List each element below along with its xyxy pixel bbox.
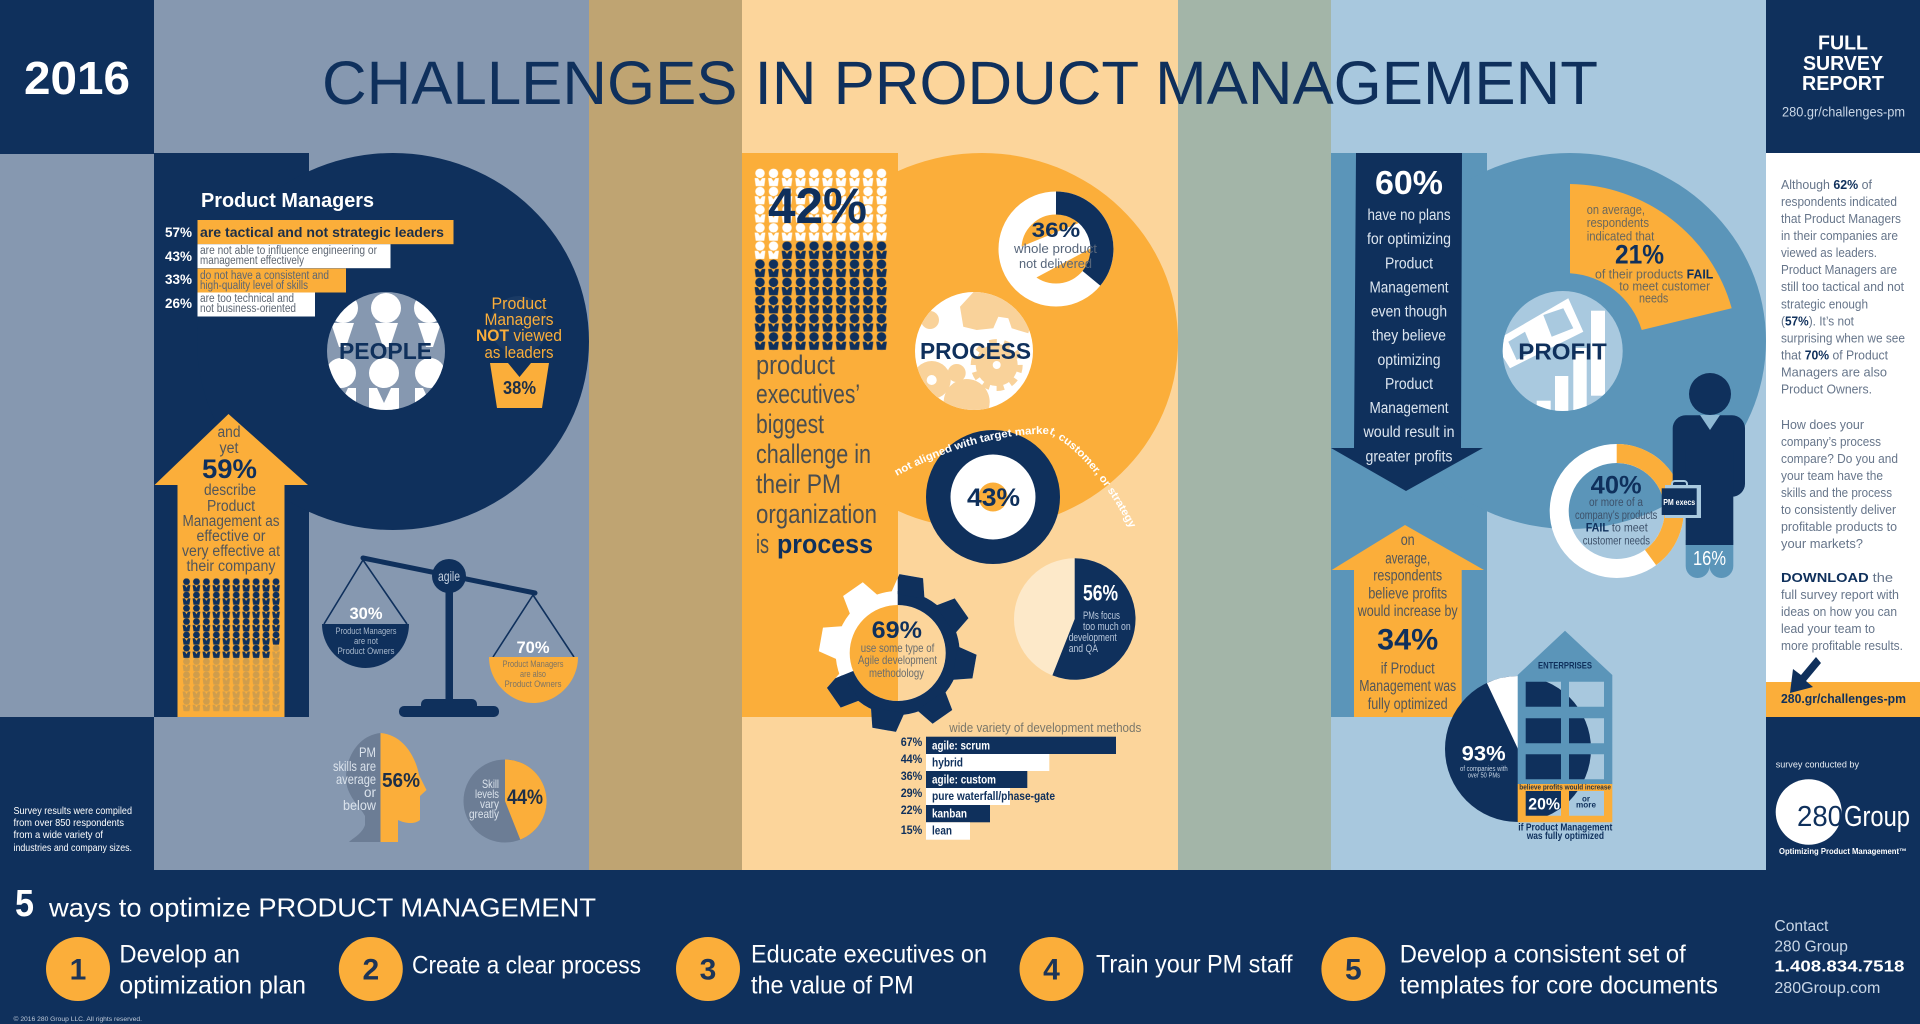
text block: survey commentary: DOWNLOAD the	[1781, 570, 1893, 585]
arrow: 59 percent effective: describe	[204, 482, 256, 499]
chart: development methods bars: 44%	[901, 752, 923, 766]
chart: development methods bars: pure waterfall/phase-gate	[932, 789, 1055, 803]
step 4: 4	[1043, 954, 1060, 986]
contact details: 280 Group	[1774, 939, 1848, 956]
callout: download link band: 280.gr/challenges-pm	[1781, 691, 1906, 706]
text block: survey commentary: full survey report with	[1781, 587, 1899, 602]
chart: development methods bars: agile: custom	[932, 772, 996, 786]
chart: gear 69 percent: 69%	[872, 617, 922, 644]
text: biggest challenge is process: organization	[756, 499, 877, 529]
arrow: 34 percent profit increase: 34%	[1377, 623, 1438, 656]
bar list: product manager traits: 43%	[165, 248, 193, 264]
bar list: product manager traits	[165, 220, 454, 316]
panel: full survey report	[1766, 0, 1920, 153]
callout: not viewed as leaders: Product	[492, 294, 547, 313]
callout: 21 percent fail: respondents	[1587, 216, 1649, 230]
logo: 280 Group: 280	[1797, 801, 1843, 833]
text block: survey commentary: surprising when we see	[1781, 330, 1905, 346]
arrow: 60 percent no plans: Management	[1370, 400, 1449, 417]
chart: agile scale: 30%	[350, 604, 382, 623]
contact details: 1.408.834.7518	[1774, 959, 1905, 976]
chart: people grid 42 percent: 42%	[768, 178, 867, 234]
chart: agile scale: are not	[354, 636, 378, 647]
chart: gear 69 percent: methodology	[869, 666, 924, 680]
step 3: 3	[700, 954, 716, 986]
text block: survey commentary: Managers are also	[1781, 364, 1887, 380]
heading: 5 ways to optimize	[15, 883, 596, 925]
text: biggest challenge is process: challenge in	[756, 439, 871, 469]
bar list: product manager traits: 33%	[165, 271, 193, 287]
step 5	[1321, 937, 1718, 1001]
icon: briefcase	[1662, 481, 1701, 518]
arrow: 60 percent no plans: for optimizing	[1367, 231, 1451, 248]
text block: survey commentary: ideas on how you can	[1781, 604, 1897, 619]
bar list: product manager traits: are too technical and	[200, 293, 294, 305]
heading: 5 ways to optimize: ways to optimize PRODUCT MANAGEMENT	[48, 893, 596, 923]
copyright: © 2016 280 Group LLC. All rights reserved.	[14, 1015, 142, 1023]
chart: agile scale: Product Owners	[338, 646, 395, 657]
callout: 21 percent fail: indicated that	[1587, 230, 1655, 244]
chart: enterprises pie and building: believe profits would increase	[1519, 782, 1611, 792]
heading: 5 ways to optimize: 5	[15, 883, 34, 925]
arrow: 60 percent no plans: they believe	[1372, 328, 1446, 345]
step 3: Educate executives on	[751, 941, 987, 969]
text block: survey commentary	[1781, 177, 1905, 653]
chart: donut 36 percent: not delivered	[1019, 256, 1092, 271]
contact details: Contact	[1774, 918, 1829, 935]
text block: survey commentary: Product Owners.	[1781, 382, 1872, 397]
chart: donut 43 percent: 43%	[967, 484, 1020, 512]
text block: survey commentary: still too tactical and not	[1781, 279, 1904, 294]
callout: not viewed as leaders: 38%	[503, 378, 536, 398]
arrow: 59 percent effective: 59%	[202, 454, 257, 484]
icon: head 56 percent skills: skills are	[333, 758, 376, 774]
chart: development methods bars: 15%	[901, 823, 923, 837]
chart: pie 44 percent skill levels: vary	[480, 797, 499, 811]
chart: enterprises pie and building	[1445, 631, 1613, 842]
panel: process	[742, 153, 1178, 840]
chart: enterprises pie and building: 93%	[1462, 743, 1506, 766]
icon: briefcase: PM execs	[1663, 497, 1695, 507]
chart: donut 36 percent: 36%	[1032, 219, 1081, 242]
logo: 280 Group: Optimizing Product Management™	[1779, 847, 1907, 856]
callout: download link band	[1766, 682, 1920, 717]
text block: survey commentary: skills and the process	[1781, 485, 1892, 500]
chart: enterprises pie and building: over 50 PMs	[1468, 772, 1500, 780]
text: biggest challenge is process: biggest	[756, 409, 825, 439]
callout: 21 percent fail	[1570, 184, 1732, 330]
chart: donut 36 percent: whole product	[1013, 241, 1097, 256]
icon: profit circle: PROFIT	[1518, 338, 1607, 364]
step 1	[46, 937, 306, 1001]
arrow: 34 percent profit increase: average,	[1385, 550, 1430, 567]
chart: agile scale: Product Managers	[336, 626, 397, 637]
callout: 21 percent fail: needs	[1639, 291, 1668, 305]
step 1: optimization plan	[119, 971, 306, 999]
bar list: product manager traits: are not able to influence engineering or	[200, 245, 377, 257]
contact details: 280Group.com	[1774, 980, 1880, 997]
title: CHALLENGES IN PRODUCT MANAGEMENT	[322, 49, 1598, 117]
chart: pie 44 percent skill levels: Skill	[482, 777, 499, 791]
callout: 21 percent fail: on average,	[1587, 203, 1645, 217]
survey note: from a wide variety of	[14, 829, 103, 841]
text block: survey commentary: Although 62% of	[1781, 177, 1872, 192]
text block: survey commentary: that Product Managers	[1781, 211, 1901, 226]
bar list: product manager traits: are tactical and not strategic leaders	[200, 224, 444, 240]
icon: process circle: PROCESS	[920, 338, 1031, 364]
chart: pie 56 percent: and QA	[1069, 643, 1099, 655]
text block: survey commentary: strategic enough	[1781, 296, 1868, 312]
callout: not viewed as leaders: as leaders	[484, 343, 554, 362]
step 1: 1	[70, 954, 86, 986]
text block: survey commentary: your team have the	[1781, 468, 1883, 483]
chart: development methods bars: wide variety of development methods	[948, 721, 1141, 735]
contact details	[1774, 918, 1905, 997]
bar list: product manager traits: high-quality level of skills	[200, 280, 308, 292]
step 2: Create a clear process	[412, 951, 641, 979]
panel: people	[154, 153, 589, 842]
arrow: 59 percent effective: very effective at	[182, 543, 281, 560]
chart: donut 40 percent: customer needs	[1583, 535, 1650, 547]
arrow: 60 percent no plans: Product	[1385, 255, 1434, 272]
logo: 280 Group: survey conducted by	[1776, 760, 1859, 771]
chart: development methods bars: 36%	[901, 769, 923, 783]
arrow: 60 percent no plans: would result in	[1363, 424, 1454, 441]
survey note: from over 850 respondents	[14, 817, 124, 829]
text block: survey commentary: How does your	[1781, 417, 1865, 432]
icon: head 56 percent skills	[333, 733, 426, 842]
logo: 280 Group	[1776, 760, 1910, 856]
text: biggest challenge is process: is	[756, 529, 769, 559]
chart: development methods bars: kanban	[932, 806, 967, 820]
chart: development methods bars: agile: scrum	[932, 738, 990, 752]
chart: pie 44 percent skill levels: 44%	[507, 786, 543, 809]
chart: donut 40 percent: or more of a	[1589, 497, 1644, 509]
arrow: 60 percent no plans: even though	[1371, 304, 1447, 321]
chart: donut 40 percent: 40%	[1591, 471, 1642, 499]
step 5: templates for core documents	[1400, 971, 1718, 999]
step 3	[676, 937, 987, 1001]
arrow: 34 percent profit increase: on	[1401, 532, 1415, 549]
callout: not viewed as leaders: Managers	[484, 310, 554, 329]
arrow: 34 percent profit increase: Management was	[1359, 678, 1456, 695]
chart: pie 44 percent skill levels	[464, 759, 547, 842]
arrow: 60 percent no plans: Product	[1385, 376, 1434, 393]
arrow: 59 percent effective: Product	[207, 498, 256, 515]
arrow: 59 percent effective: their company	[186, 558, 276, 575]
arrow: 60 percent no plans: 60%	[1375, 164, 1443, 201]
chart: pie 56 percent: development	[1069, 632, 1117, 644]
step 4	[1020, 937, 1293, 1001]
arrow: 34 percent profit increase: respondents	[1373, 568, 1442, 585]
icon: process circle	[915, 292, 1033, 410]
chart: pie 44 percent skill levels: greatly	[469, 807, 499, 821]
chart: development methods bars: 22%	[901, 803, 923, 817]
survey note: Survey results were compiled	[14, 805, 132, 817]
icon: people circle: PEOPLE	[339, 338, 432, 364]
panel: full survey report: FULL	[1818, 32, 1868, 54]
icon: head 56 percent skills: below	[343, 797, 377, 813]
chart: development methods bars: 67%	[901, 735, 923, 749]
step 1: Develop an	[119, 941, 240, 969]
chart: people grid 42 percent	[753, 169, 888, 350]
panel: profit	[1331, 153, 1766, 842]
text block: survey commentary: profitable products to	[1781, 519, 1897, 534]
text block: survey commentary: more profitable results.	[1781, 638, 1903, 653]
arrow: 60 percent no plans: have no plans	[1368, 207, 1451, 224]
callout: 21 percent fail: to meet customer	[1619, 280, 1710, 294]
text block: survey commentary: respondents indicated	[1781, 194, 1897, 209]
panel: full survey report: SURVEY	[1803, 53, 1884, 75]
chart: pie 56 percent	[1014, 558, 1136, 680]
text block: survey commentary: company’s process	[1781, 434, 1881, 449]
panel: full survey report: 280.gr/challenges-pm	[1782, 104, 1905, 120]
icon: head 56 percent skills: PM	[359, 744, 376, 760]
arrow: 34 percent profit increase: believe profits	[1368, 585, 1447, 602]
chart: pie 56 percent: 56%	[1083, 581, 1118, 606]
text: biggest challenge is process: executives’	[756, 379, 860, 409]
arrow: 59 percent effective: yet	[220, 440, 239, 457]
chart: donut 43 percent	[894, 426, 1136, 564]
bar list: product manager traits: not business-oriented	[200, 303, 296, 315]
chart: agile scale: Product Owners	[504, 679, 562, 690]
text block: survey commentary: your markets?	[1781, 536, 1863, 551]
callout: not viewed as leaders	[476, 294, 562, 408]
bar list: product manager traits: do not have a consistent and	[200, 270, 329, 282]
arrow: points to download link	[1790, 657, 1821, 693]
bar list: product manager traits: 26%	[165, 295, 193, 311]
text: biggest challenge is process	[756, 350, 877, 559]
arrow: 60 percent no plans: greater profits	[1366, 449, 1453, 466]
chart: donut 36 percent	[1010, 203, 1102, 295]
text: biggest challenge is process: their PM	[756, 469, 841, 499]
chart: donut 40 percent: FAIL to meet	[1586, 523, 1648, 535]
arrow: 59 percent effective: effective or	[196, 528, 266, 545]
callout: not viewed as leaders: NOT viewed	[476, 326, 562, 345]
chart: enterprises pie and building: or	[1582, 795, 1590, 804]
panel: full survey report: REPORT	[1802, 73, 1884, 95]
text block: survey commentary: to consistently deliver	[1781, 502, 1897, 517]
text block: survey commentary: in their companies are	[1781, 228, 1898, 243]
chart: enterprises pie and building: was fully optimized	[1526, 831, 1604, 842]
arrow: 59 percent effective: and	[218, 424, 240, 441]
callout: 21 percent fail: of their products FAIL	[1595, 267, 1714, 281]
chart: development methods bars: 29%	[901, 786, 923, 800]
chart: donut 40 percent: company’s products	[1575, 510, 1658, 522]
chart: agile scale: agile	[438, 568, 460, 584]
chart: enterprises pie and building: if Product Management	[1518, 823, 1613, 834]
chart: pie 56 percent: PMs focus	[1083, 610, 1120, 622]
text block: survey commentary: Product Managers are	[1781, 262, 1897, 277]
chart: development methods bars	[901, 721, 1141, 840]
icon: head 56 percent skills: or	[364, 784, 376, 800]
text block: survey commentary: viewed as leaders.	[1781, 245, 1877, 260]
icon: people circle	[326, 292, 445, 412]
icon: head 56 percent skills: 56%	[382, 770, 420, 792]
heading: product managers: Product Managers	[201, 190, 374, 212]
chart: development methods bars: lean	[932, 824, 952, 838]
curved label: not aligned with target market, customer, or strategy	[894, 426, 1136, 526]
bar list: product manager traits: management effectively	[200, 255, 304, 267]
chart: enterprises pie and building: of companies with	[1460, 766, 1508, 773]
chart: agile scale: 70%	[516, 638, 550, 657]
chart: agile scale	[322, 558, 578, 717]
chart: pie 44 percent skill levels: levels	[475, 787, 499, 801]
icon: PM exec figure: 16%	[1693, 548, 1726, 570]
step 2	[339, 937, 641, 1001]
survey note: industries and company sizes.	[14, 842, 132, 854]
chart: gear 69 percent: Agile development	[858, 653, 938, 667]
chart: gear 69 percent: use some type of	[861, 641, 935, 655]
bar list: product manager traits: 57%	[165, 224, 193, 240]
text block: survey commentary: that 70% of Product	[1781, 348, 1888, 362]
step 2: 2	[362, 954, 379, 986]
arrow: 59 percent effective	[154, 414, 308, 717]
text: biggest challenge is process: process	[777, 529, 873, 559]
icon: profit circle	[1500, 291, 1623, 413]
year badge: 2016	[24, 52, 130, 104]
arrow: 34 percent profit increase: fully optimized	[1368, 696, 1448, 713]
callout: 21 percent fail: 21%	[1615, 239, 1664, 269]
text block: survey commentary: lead your team to	[1781, 621, 1875, 636]
icon: head 56 percent skills: average	[336, 771, 376, 787]
step 4: Train your PM staff	[1096, 951, 1293, 979]
arrow: 34 percent profit increase: if Product	[1381, 660, 1435, 677]
arrow: 60 percent no plans: optimizing	[1378, 352, 1440, 369]
text block: survey commentary: (57%). It’s not	[1781, 314, 1854, 328]
chart: pie 56 percent: too much on	[1083, 621, 1131, 633]
step 5: 5	[1345, 954, 1362, 986]
arrow: 59 percent effective: Management as	[182, 513, 280, 530]
chart: enterprises pie and building: more	[1576, 800, 1597, 810]
arrow: 60 percent no plans	[1331, 153, 1483, 491]
chart: donut 40 percent	[1559, 454, 1674, 568]
step 5: Develop a consistent set of	[1400, 941, 1686, 969]
chart: agile scale: are also	[520, 669, 546, 680]
arrow: 34 percent profit increase	[1332, 525, 1484, 717]
chart: enterprises pie and building: ENTERPRISES	[1538, 660, 1592, 671]
chart: people grid 59 of 100	[182, 578, 281, 711]
survey note	[14, 805, 132, 854]
arrow: 34 percent profit increase: would increase by	[1357, 603, 1458, 620]
chart: gear 69 percent	[818, 573, 977, 733]
chart: enterprises pie and building: 20%	[1528, 794, 1560, 813]
step 3: the value of PM	[751, 971, 914, 999]
text block: survey commentary: compare? Do you and	[1781, 451, 1898, 466]
chart: agile scale: Product Managers	[502, 659, 564, 670]
arrow: 60 percent no plans: Management	[1370, 279, 1449, 296]
text: biggest challenge is process: product	[756, 350, 836, 380]
chart: development methods bars: hybrid	[932, 756, 963, 770]
icon: PM exec figure	[1662, 373, 1745, 578]
